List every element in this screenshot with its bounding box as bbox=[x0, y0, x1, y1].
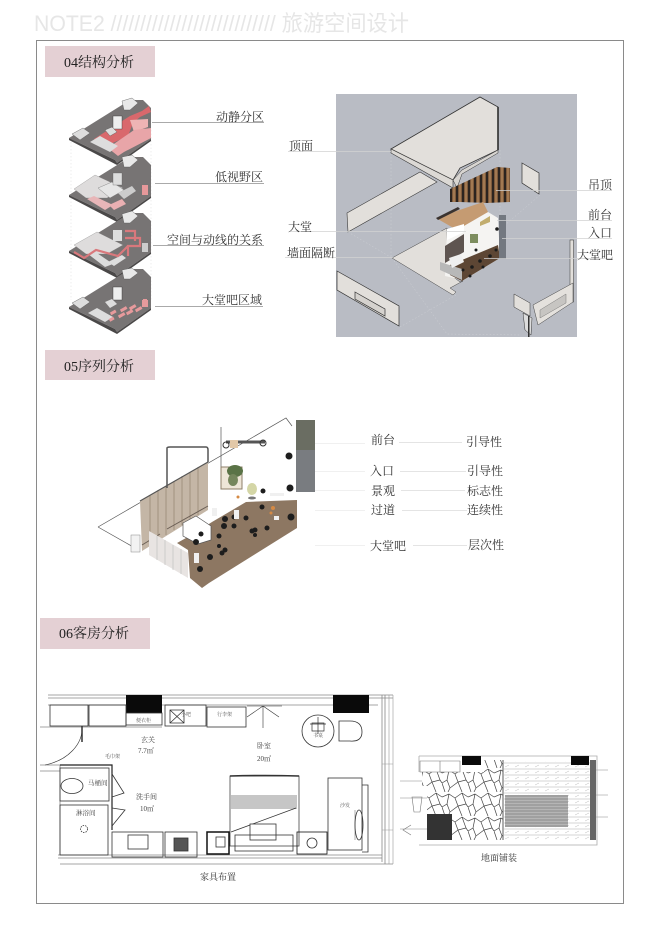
room labels: 10㎡ bbox=[140, 804, 154, 813]
caption: floor finish: 地面铺装 bbox=[481, 852, 517, 863]
sofa bbox=[328, 778, 368, 852]
exploded axonometric model: 前台 bbox=[588, 208, 612, 222]
sequence axonometric: 入口 bbox=[370, 464, 394, 478]
white partition bbox=[149, 531, 188, 578]
plate: space and circulation relation bbox=[69, 211, 151, 278]
stone floor bbox=[422, 772, 503, 786]
bed bbox=[230, 776, 299, 851]
sequence axonometric: 过道 bbox=[371, 502, 395, 517]
room labels: 毛巾架 bbox=[105, 753, 120, 760]
heading: 06 guest room analysis: 06客房分析 bbox=[59, 625, 129, 642]
heading: 04 structure analysis: 04结构分析 bbox=[64, 54, 134, 71]
page title: NOTE2 //////////////////////////// 旅游空间设计 bbox=[34, 11, 409, 36]
sequence axonometric: 标志性 bbox=[467, 483, 503, 498]
exploded zoning diagrams: 动静分区 bbox=[216, 109, 264, 124]
room labels: 淋浴间 bbox=[76, 808, 96, 817]
sequence axonometric: 层次性 bbox=[468, 537, 504, 552]
ceiling bbox=[391, 97, 498, 188]
window wall panel bbox=[337, 271, 399, 326]
labels: 顶面 bbox=[289, 139, 313, 153]
leader lines bbox=[285, 152, 612, 258]
plan outline bbox=[98, 418, 292, 548]
slatted wall bbox=[140, 462, 208, 551]
labels: 前台 bbox=[371, 433, 395, 447]
room labels: 7.7㎡ bbox=[138, 746, 154, 755]
exploded zoning diagrams: 大堂吧区域 bbox=[202, 292, 262, 307]
round desk and chair bbox=[302, 715, 362, 747]
room labels: 玄关 bbox=[141, 735, 155, 744]
entrance wall panels bbox=[514, 240, 574, 337]
heading: 05 sequence analysis bbox=[45, 350, 155, 380]
sequence axonometric bbox=[98, 418, 504, 588]
exploded axonometric model bbox=[285, 94, 613, 337]
reception counter bbox=[226, 440, 265, 444]
sequence axonometric: 引导性 bbox=[467, 463, 503, 478]
entry door bbox=[45, 726, 82, 765]
room labels: 卧室 bbox=[257, 741, 271, 750]
exploded axonometric model: 入口 bbox=[588, 226, 612, 240]
room labels: 洗手间 bbox=[136, 792, 157, 801]
room labels: 沙发 bbox=[340, 802, 350, 809]
lobby floor plate bbox=[392, 202, 506, 295]
seated figures bbox=[193, 452, 294, 572]
vanity bbox=[112, 832, 163, 857]
room labels: 小吧 bbox=[181, 711, 191, 718]
dark bath floor bbox=[427, 814, 452, 840]
room labels: 马桶间 bbox=[88, 778, 108, 787]
wardrobe and storage bbox=[50, 705, 88, 726]
carpet bbox=[505, 795, 568, 827]
room labels: 行李架 bbox=[217, 711, 232, 718]
bath door swings bbox=[112, 774, 125, 826]
gate frame bbox=[167, 447, 208, 488]
bathroom bbox=[60, 768, 109, 801]
exploded axonometric model: 大堂 bbox=[288, 219, 312, 234]
caption: furniture layout: 家具布置 bbox=[200, 871, 236, 882]
exploded zoning diagrams: 空间与动线的关系 bbox=[167, 232, 263, 247]
room labels: 书桌 bbox=[313, 732, 323, 739]
leader lines bbox=[315, 444, 365, 546]
side tables bbox=[207, 832, 327, 854]
heading: 06 guest room analysis bbox=[40, 618, 150, 649]
white box bbox=[183, 516, 211, 544]
exploded axonometric model: 吊顶 bbox=[588, 178, 613, 192]
plate: low vision zone bbox=[69, 155, 151, 222]
slatted suspended ceiling bbox=[450, 167, 510, 203]
ceiling fixture bbox=[247, 706, 282, 728]
exploded axonometric model: 大堂吧 bbox=[577, 247, 613, 262]
heading: 05 sequence analysis: 05序列分析 bbox=[64, 358, 134, 375]
plate: circulation zoning bbox=[69, 98, 151, 165]
window openings bbox=[126, 695, 369, 713]
windows bbox=[462, 756, 481, 765]
sequence axonometric: 景观 bbox=[371, 484, 395, 498]
exploded zoning diagrams: 低视野区 bbox=[215, 170, 263, 184]
room labels: 20㎡ bbox=[257, 754, 271, 763]
toilet bbox=[61, 778, 83, 794]
wood floor bbox=[504, 761, 594, 840]
long wall panel bbox=[347, 172, 437, 232]
exploded axonometric model: 墙面隔断 bbox=[287, 245, 335, 260]
sequence axonometric: 连续性 bbox=[467, 502, 503, 517]
labels and leader lines bbox=[152, 122, 264, 306]
floor finish plan bbox=[400, 756, 608, 845]
heading: 04 structure analysis bbox=[45, 46, 155, 77]
sequence axonometric: 大堂吧 bbox=[370, 538, 406, 553]
guest room furniture plan bbox=[40, 695, 393, 864]
border strip bbox=[590, 760, 596, 840]
exploded zoning diagrams bbox=[69, 98, 264, 334]
room labels: 便衣柜 bbox=[136, 717, 151, 724]
brown lobby floor bbox=[177, 500, 297, 588]
room labels bbox=[76, 711, 350, 817]
green plant feature bbox=[221, 465, 257, 500]
sequence axonometric: 引导性 bbox=[466, 434, 502, 449]
small wall panel bbox=[522, 163, 539, 194]
front desk block bbox=[296, 420, 315, 492]
plate: lobby bar area bbox=[69, 268, 151, 334]
floor drain bbox=[80, 826, 88, 832]
walls bbox=[40, 695, 393, 864]
